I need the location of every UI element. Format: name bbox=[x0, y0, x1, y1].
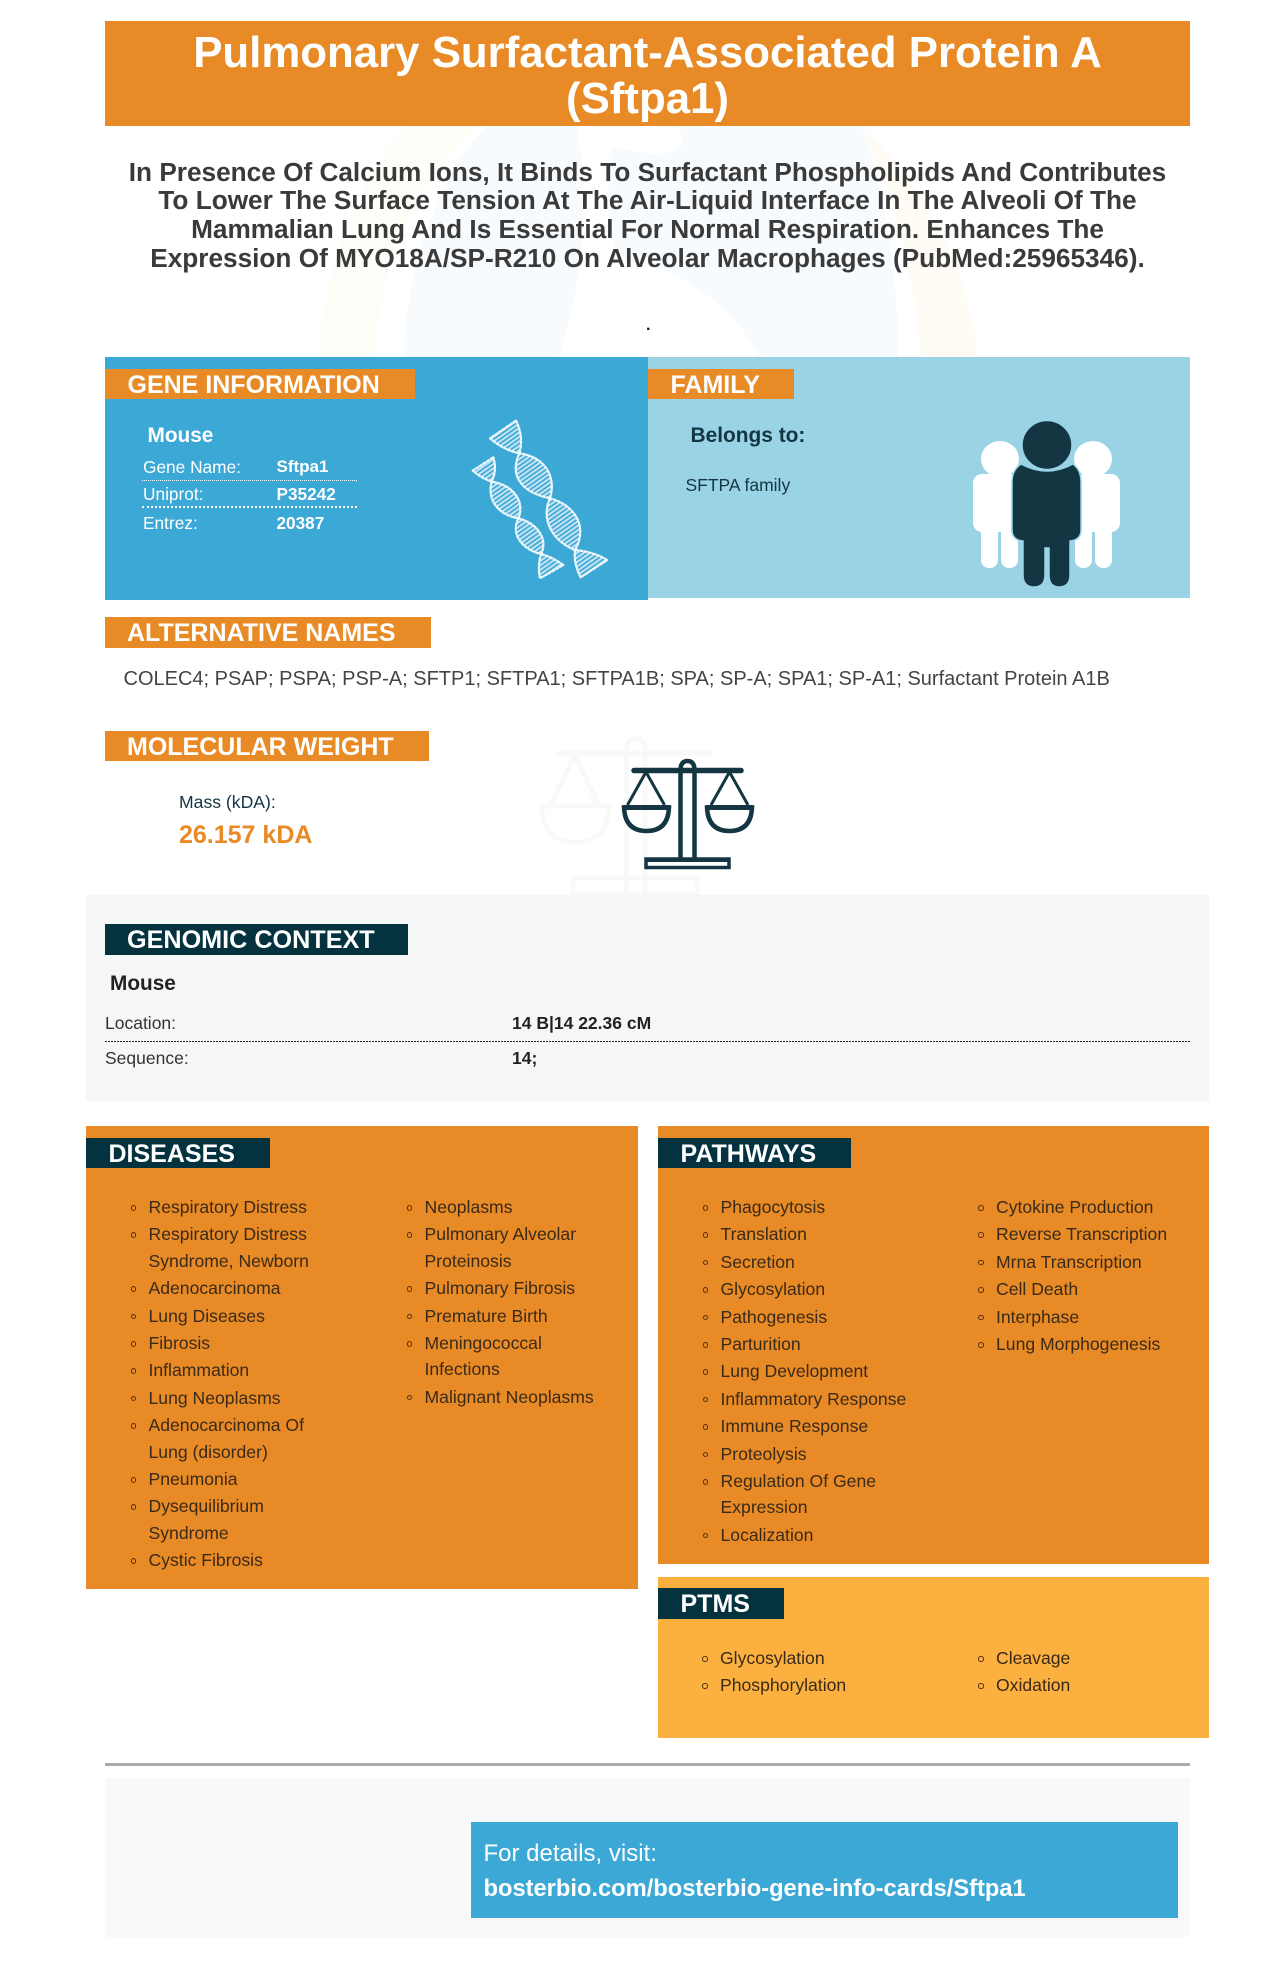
pathways list column 1: Expression bbox=[720, 1497, 808, 1517]
PTMs list column 2: Cleavage bbox=[996, 1648, 1070, 1668]
description text bbox=[129, 156, 1166, 273]
family name: SFTPA family bbox=[686, 475, 790, 495]
gene info table bbox=[142, 457, 357, 532]
alternative names text: COLEC4; PSAP; PSPA; PSP-A; SFTP1; SFTPA1; SFTPA1B; SPA; SP-A; SPA1; SP-A1; Surfactant Protein A1B bbox=[124, 668, 1110, 690]
location row: 14 B|14 22.36 cM bbox=[512, 1013, 651, 1033]
title banner: Pulmonary Surfactant-Associated Protein A bbox=[193, 28, 1102, 77]
heading: diseases bbox=[86, 1138, 270, 1168]
PTMs list column 1: Glycosylation bbox=[720, 1648, 825, 1668]
heading: family bbox=[648, 369, 794, 399]
diseases list column 2: Malignant Neoplasms bbox=[424, 1387, 594, 1407]
PTMs list column 1: Phosphorylation bbox=[720, 1675, 846, 1695]
pathways list column 1: Lung Development bbox=[720, 1361, 868, 1381]
diseases list column 2: Infections bbox=[424, 1359, 500, 1379]
gene info table: Gene Name: bbox=[143, 457, 241, 477]
gene info table: Sftpa1 bbox=[276, 457, 328, 476]
pathways list column 1: Pathogenesis bbox=[720, 1307, 827, 1327]
panel: family bbox=[648, 357, 1190, 598]
diseases list column 2: Premature Birth bbox=[424, 1306, 548, 1326]
description text: Mammalian Lung And Is Essential For Normal Respiration. Enhances The bbox=[191, 214, 1104, 244]
pathways list column 2: Mrna Transcription bbox=[996, 1252, 1142, 1272]
gene info table: P35242 bbox=[276, 484, 336, 504]
pathways list column 2 bbox=[978, 1197, 1167, 1354]
sequence row: 14; bbox=[512, 1048, 537, 1068]
pathways list column 1: Parturition bbox=[720, 1334, 801, 1354]
species label: Mouse bbox=[110, 972, 176, 995]
pathways list column 2: Cytokine Production bbox=[996, 1197, 1153, 1217]
diseases list column 1: Lung Diseases bbox=[148, 1306, 265, 1326]
callout: details link bbox=[471, 1822, 1178, 1918]
description text: In Presence Of Calcium Ions, It Binds To Surfactant Phospholipids And Contributes bbox=[129, 156, 1166, 186]
belongs to label: Belongs to: bbox=[690, 424, 805, 447]
panel: diseases bbox=[86, 1126, 638, 1589]
diseases list column 2: Proteinosis bbox=[424, 1251, 512, 1271]
diseases list column 1: Inflammation bbox=[148, 1360, 249, 1380]
title banner: (Sftpa1) bbox=[566, 74, 729, 123]
pathways list column 1 bbox=[703, 1197, 906, 1545]
heading: alternative names: ALTERNATIVE NAMES bbox=[127, 619, 396, 647]
callout label: For details, visit: bbox=[484, 1840, 657, 1866]
heading: PTMs bbox=[658, 1588, 784, 1619]
diseases list column 1: Syndrome, Newborn bbox=[148, 1251, 309, 1271]
pathways list column 2: Lung Morphogenesis bbox=[996, 1334, 1160, 1354]
diseases list column 1: Adenocarcinoma Of bbox=[148, 1415, 304, 1435]
description text: To Lower The Surface Tension At The Air-Liquid Interface In The Alveoli Of The bbox=[158, 185, 1137, 215]
faint scale watermark bbox=[530, 730, 730, 895]
location row: Location: bbox=[105, 1013, 176, 1033]
location row bbox=[105, 1013, 651, 1033]
small dot: . bbox=[646, 317, 650, 334]
panel: pathways bbox=[658, 1126, 1209, 1564]
callout URL: bosterbio.com/bosterbio-gene-info-cards/Sftpa1 bbox=[484, 1876, 1026, 1902]
sequence row bbox=[105, 1048, 537, 1068]
mass label: Mass (kDA): bbox=[179, 792, 276, 812]
diseases list column 1: Dysequilibrium bbox=[148, 1496, 264, 1516]
PTMs list column 2: Oxidation bbox=[996, 1675, 1070, 1695]
background watermark: lungs bbox=[859, 127, 978, 357]
diseases list column 2 bbox=[407, 1197, 594, 1407]
diseases list column 2: Neoplasms bbox=[424, 1197, 513, 1217]
pathways list column 1: Translation bbox=[720, 1224, 807, 1244]
pathways list column 2: Interphase bbox=[996, 1307, 1079, 1327]
panel: PTMs bbox=[658, 1577, 1209, 1738]
pathways list column 1: Secretion bbox=[720, 1252, 795, 1272]
species label: Mouse bbox=[148, 424, 213, 447]
heading: pathways: PATHWAYS bbox=[680, 1140, 816, 1168]
diseases list column 1: Syndrome bbox=[148, 1523, 229, 1543]
panel: footer bbox=[105, 1778, 1190, 1937]
icon: balance scale bbox=[622, 758, 754, 870]
PTMs list column 2 bbox=[978, 1648, 1070, 1695]
diseases list column 1: Cystic Fibrosis bbox=[148, 1550, 263, 1570]
pathways list column 2: Cell Death bbox=[996, 1279, 1078, 1299]
pathways list column 1: Regulation Of Gene bbox=[720, 1471, 876, 1491]
diseases list column 1: Pneumonia bbox=[148, 1469, 238, 1489]
pathways list column 1: Proteolysis bbox=[720, 1444, 807, 1464]
sequence row: Sequence: bbox=[105, 1048, 189, 1068]
heading: genomic context: GENOMIC CONTEXT bbox=[127, 926, 375, 954]
pathways list column 1: Phagocytosis bbox=[720, 1197, 825, 1217]
gene info table: Uniprot: bbox=[143, 484, 204, 504]
gene info table: 20387 bbox=[276, 512, 324, 532]
pathways list column 1: Inflammatory Response bbox=[720, 1389, 906, 1409]
heading: family: FAMILY bbox=[670, 371, 760, 399]
diseases list column 1: Lung Neoplasms bbox=[148, 1388, 281, 1408]
heading: diseases: DISEASES bbox=[108, 1140, 235, 1168]
pathways list column 1: Glycosylation bbox=[720, 1279, 825, 1299]
pathways list column 2: Reverse Transcription bbox=[996, 1224, 1167, 1244]
heading: gene information: GENE INFORMATION bbox=[128, 371, 380, 399]
icon: family of three people bbox=[973, 421, 1120, 586]
diseases list column 1: Respiratory Distress bbox=[148, 1197, 307, 1217]
heading: molecular weight: MOLECULAR WEIGHT bbox=[127, 733, 394, 761]
panel: gene information bbox=[105, 357, 648, 600]
diseases list column 1: Lung (disorder) bbox=[148, 1442, 268, 1462]
description text: Expression Of MYO18A/SP-R210 On Alveolar Macrophages (PubMed:25965346). bbox=[150, 243, 1145, 273]
diseases list column 1: Fibrosis bbox=[148, 1333, 210, 1353]
panel: genomic context bbox=[86, 895, 1209, 1101]
diseases list column 1 bbox=[131, 1197, 309, 1570]
diseases list column 1: Adenocarcinoma bbox=[148, 1278, 281, 1298]
title banner bbox=[105, 21, 1190, 126]
diseases list column 2: Pulmonary Alveolar bbox=[424, 1224, 576, 1244]
pathways list column 1: Immune Response bbox=[720, 1416, 868, 1436]
PTMs list column 1 bbox=[702, 1648, 846, 1695]
heading: PTMs: PTMS bbox=[680, 1590, 750, 1618]
pathways list column 1: Localization bbox=[720, 1525, 813, 1545]
diseases list column 2: Meningococcal bbox=[424, 1333, 542, 1353]
mass value: 26.157 kDA bbox=[179, 820, 312, 848]
diseases list column 2: Pulmonary Fibrosis bbox=[424, 1278, 575, 1298]
diseases list column 1: Respiratory Distress bbox=[148, 1224, 307, 1244]
gene info table: Entrez: bbox=[143, 512, 198, 532]
icon: DNA helices bbox=[472, 420, 608, 580]
heading: pathways bbox=[658, 1138, 850, 1168]
